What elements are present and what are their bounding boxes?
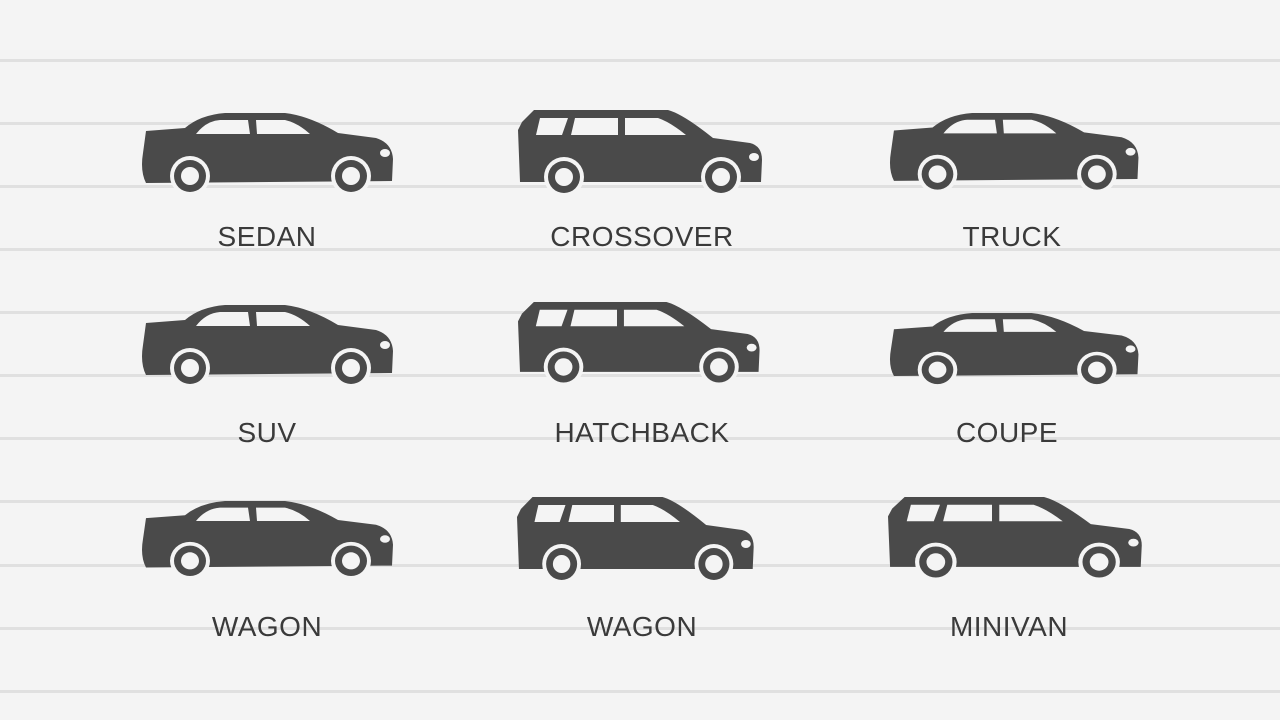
label: coupe: COUPE: [956, 417, 1058, 448]
label: crossover: CROSSOVER: [550, 221, 734, 252]
label: sedan: SEDAN: [218, 221, 316, 252]
label: truck: TRUCK: [963, 221, 1061, 252]
icon: hatchback: [518, 302, 760, 386]
icon: suv: [142, 305, 393, 388]
icon: crossover: [518, 110, 762, 197]
label: minivan: MINIVAN: [950, 611, 1068, 642]
icon: coupe: [890, 313, 1138, 388]
label: wagon 1: WAGON: [212, 611, 322, 642]
label: hatchback: HATCHBACK: [554, 417, 730, 448]
icon: wagon sedan: [142, 501, 393, 580]
icon: wagon: [517, 497, 754, 584]
icon: sedan: [142, 113, 393, 196]
label: suv: SUV: [237, 417, 297, 448]
icon: minivan: [888, 497, 1142, 581]
icon: truck: [890, 113, 1138, 194]
label: wagon 2: WAGON: [587, 611, 697, 642]
